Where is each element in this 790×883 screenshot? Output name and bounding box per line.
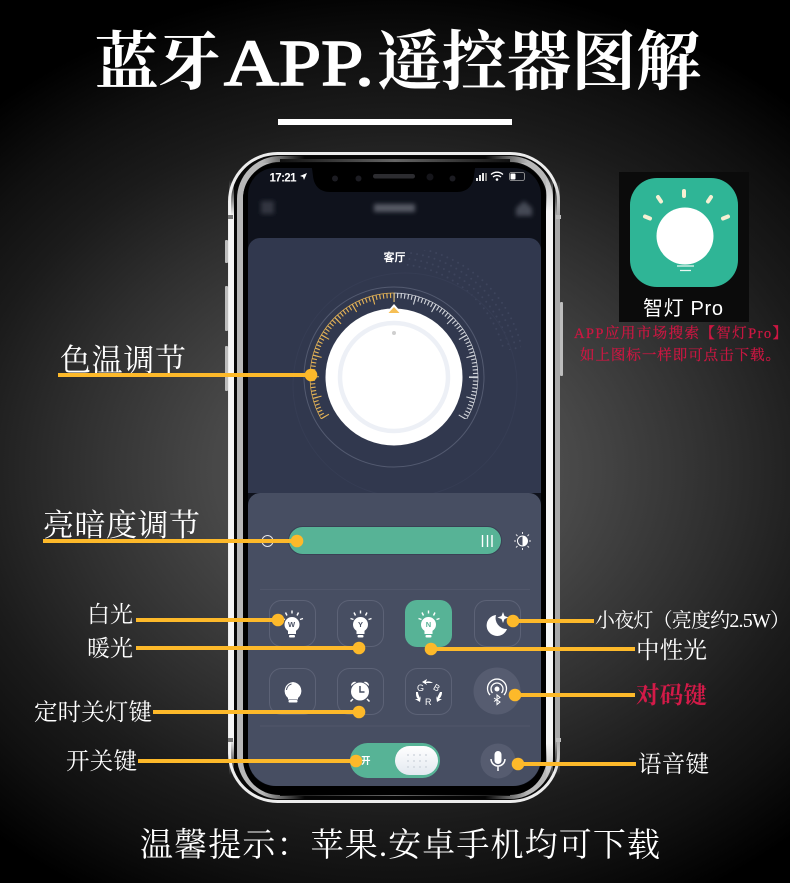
phone body — [228, 152, 561, 803]
button: night light — [474, 600, 520, 646]
callout: white light — [87, 602, 284, 627]
phone — [225, 152, 563, 803]
screen background — [248, 168, 541, 786]
dial ticks — [310, 292, 478, 419]
bulb rays — [645, 191, 728, 218]
phone side buttons — [225, 240, 563, 391]
callout: pairing key — [509, 682, 708, 709]
button: warm light — [338, 600, 384, 646]
app icon — [619, 172, 749, 322]
title — [95, 27, 701, 100]
callout: night light: 小夜灯（亮度约2.5W） — [595, 609, 790, 632]
callout: neutral light: 中性光 — [636, 637, 707, 664]
blurred app header — [261, 201, 532, 216]
callout: warm light — [87, 636, 365, 661]
dial decoration — [304, 250, 521, 468]
dial knob — [326, 304, 462, 446]
button: RGB cycle: R — [425, 697, 432, 707]
button: solid bulb — [270, 668, 316, 714]
power toggle: 开 — [361, 756, 371, 767]
title: 遥控器图解 — [377, 27, 701, 99]
callout: brightness: 亮暗度调节 — [43, 508, 200, 543]
button: white light: W — [288, 620, 296, 629]
icon: high brightness — [514, 532, 531, 550]
download note: APP应用市场搜索【智灯Pro】 — [574, 324, 787, 342]
button: RGB cycle: G — [417, 683, 424, 693]
download note: 如上图标一样即可点击下载。 — [580, 346, 780, 364]
callout: neutral light — [425, 637, 707, 664]
callout: power key — [66, 748, 362, 775]
title: APP. — [224, 27, 374, 100]
callout: voice key: 语音键 — [638, 751, 709, 778]
notch — [308, 163, 479, 192]
icon tile — [630, 178, 738, 287]
button: neutral light active — [405, 600, 452, 647]
panel heading: 客厅 — [384, 250, 406, 264]
brightness slider — [288, 526, 502, 555]
button: alarm clock timer — [338, 668, 384, 714]
icon: low brightness — [262, 536, 273, 546]
callout: colour temperature: 色温调节 — [60, 343, 186, 378]
app name: 智灯 Pro — [643, 297, 723, 320]
callout: white light: 白光 — [87, 602, 133, 627]
button: RGB cycle: B — [431, 682, 442, 694]
button: bluetooth pairing — [474, 668, 520, 714]
callout: pairing key: 对码键 — [636, 682, 708, 709]
title underline — [278, 119, 512, 125]
callout: power key: 开关键 — [66, 748, 137, 775]
button: RGB cycle — [406, 668, 452, 714]
button: white light — [270, 600, 316, 646]
callout: brightness — [43, 508, 303, 547]
lower control panel — [248, 493, 541, 786]
download note — [574, 324, 787, 364]
callout: timer off key — [34, 699, 365, 726]
callout: colour temperature — [58, 343, 317, 381]
button: warm light: Y — [358, 620, 363, 629]
button: microphone — [480, 744, 516, 778]
bulb — [656, 208, 714, 264]
footer tip: 温馨提示：苹果.安卓手机均可下载 — [140, 827, 660, 864]
title: 蓝牙 — [95, 28, 221, 98]
status bar — [270, 172, 524, 184]
status bar: 17:21 — [270, 172, 297, 184]
callout: timer off key: 定时关灯键 — [34, 699, 152, 726]
button: neutral light active: N — [426, 620, 431, 629]
callout: night light — [507, 609, 790, 632]
colour temperature panel — [248, 238, 541, 493]
power toggle — [350, 743, 440, 778]
callout: voice key — [512, 751, 709, 778]
callout: warm light: 暖光 — [87, 636, 133, 661]
